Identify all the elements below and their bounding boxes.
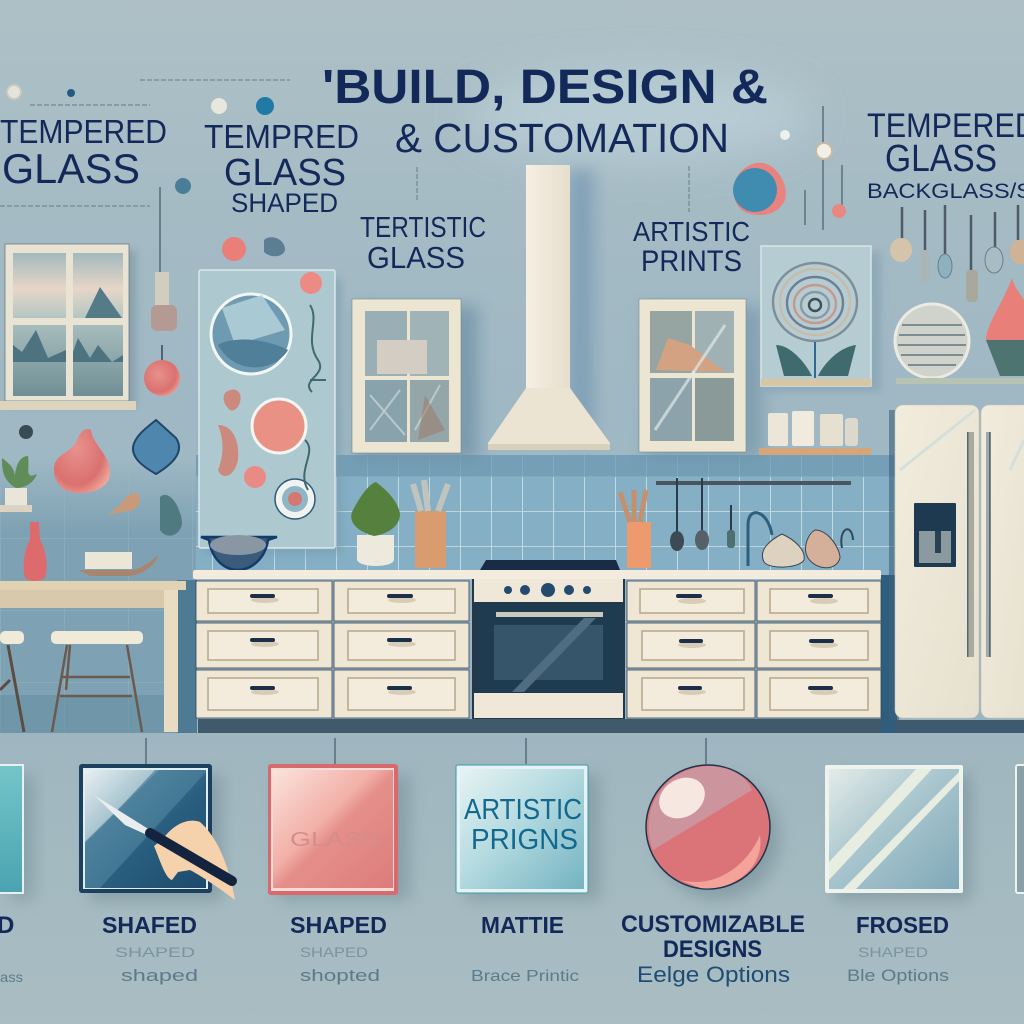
wall ornaments (19, 237, 285, 536)
caption: customizable designs: Eelge Options (637, 962, 790, 987)
sample card: shaped pink: GLASS (290, 829, 380, 851)
vase (24, 522, 47, 581)
main title (322, 61, 768, 161)
utensil crock left (413, 480, 448, 568)
caption: frosed: FROSED (856, 912, 949, 938)
caption: frosed: SHAPED (858, 944, 928, 960)
glass panel with shapes (199, 270, 342, 554)
hanging decor right of title (780, 106, 846, 230)
target disc (275, 479, 315, 519)
caption: shaped: SHAPED (300, 944, 368, 960)
icon: pink ball (144, 345, 180, 396)
caption: mattie: MATTIE (481, 912, 564, 938)
sample card: teal partial (0, 765, 34, 900)
caption: customizable designs (621, 911, 805, 987)
label: artistic prints: PRINTS (641, 245, 742, 278)
small wall dots and dashed rules (0, 80, 689, 212)
icon: pear (54, 418, 110, 493)
caption: shafed (102, 912, 198, 985)
caption: shaped (290, 912, 387, 985)
caption: partial left: ass (0, 969, 23, 985)
main title: & CUSTOMATION (395, 115, 729, 161)
caption: mattie (471, 912, 579, 985)
utensil rail with hanging tools (656, 478, 851, 566)
label: tempred glass shaped: TEMPRED (204, 118, 359, 155)
title glow (470, 70, 810, 160)
caption: partial left (0, 912, 23, 985)
sample card: partial right (1016, 765, 1024, 893)
caption: shafed: SHAFED (102, 912, 197, 938)
connector lines (146, 738, 706, 764)
sample card: frosted (825, 765, 971, 900)
plant on shelf (0, 456, 37, 512)
base cabinets left (196, 581, 469, 718)
label: tempred glass shaped (204, 118, 359, 218)
cabinet window right (639, 299, 763, 458)
label: tempred glass shaped: GLASS (224, 152, 346, 194)
icon: blue drop (133, 420, 179, 474)
cooking pot (201, 535, 277, 570)
pots on counter right (762, 529, 853, 568)
caption: shafed: shaped (121, 966, 198, 985)
caption: customizable designs: CUSTOMIZABLE (621, 911, 805, 938)
caption: shafed: SHAPED (115, 944, 195, 960)
label: tempred glass shaped: SHAPED (231, 188, 338, 218)
label: tempered glass left (0, 113, 167, 192)
striped plate (895, 304, 969, 378)
wall background (0, 0, 1024, 735)
caption: customizable designs: DESIGNS (663, 936, 762, 963)
art print on glass (761, 246, 881, 392)
toe kick (198, 719, 881, 733)
label: tertistic glass: GLASS (367, 240, 465, 275)
fridge (889, 405, 1024, 733)
label: tempered glass left: TEMPERED (0, 113, 167, 150)
caption: frosed: Ble Options (847, 966, 949, 985)
cooktop (480, 560, 620, 570)
stool partial (0, 631, 24, 732)
sample card: artistic prints (456, 765, 600, 900)
right shelf (896, 378, 1024, 384)
hand holding cutter (94, 795, 235, 900)
label: artistic prints (633, 216, 750, 278)
pink disc (252, 399, 306, 453)
countertop (193, 570, 881, 579)
sample: pink glass sphere (646, 765, 780, 900)
range hood (488, 165, 610, 450)
top pink blob (300, 272, 322, 294)
tiled backsplash (0, 455, 897, 734)
base cabinets right (627, 581, 881, 718)
label: tempered glass backglass (867, 107, 1024, 203)
label: tempered glass left: GLASS (2, 145, 140, 192)
hanging utensils (890, 205, 1024, 302)
water dispenser (914, 503, 956, 567)
sample card: shaped navy with hand (79, 764, 235, 900)
label: tempered glass backglass: BACKGLASS/S (867, 180, 1024, 203)
tray with dish (78, 552, 158, 576)
utensil crock right (620, 490, 651, 568)
botanical sketch (304, 305, 326, 490)
round blue mirror (211, 294, 291, 374)
potted plant (351, 482, 400, 566)
stool (51, 631, 143, 732)
sample card: artistic prints: ARTISTIC (464, 794, 582, 826)
sample card: shaped pink (268, 764, 410, 900)
caption: shaped: shopted (300, 966, 380, 985)
lower panel (0, 733, 1024, 1024)
small pink disc (244, 466, 266, 488)
caption: mattie: Brace Printic (471, 968, 579, 985)
icon: hanging brush (151, 187, 177, 331)
cups on shelf (759, 411, 871, 455)
pink basket vase (986, 278, 1024, 376)
main title: 'BUILD, DESIGN & (322, 61, 768, 114)
oven (472, 579, 625, 720)
caption: frosed (847, 912, 949, 985)
caption: shaped: SHAPED (290, 912, 387, 938)
small ornaments (218, 390, 241, 476)
dining table (0, 581, 186, 732)
label: tertistic glass: TERTISTIC (360, 212, 486, 244)
window with mountains (0, 244, 136, 410)
blue and pink ornament (733, 163, 786, 215)
label: tertistic glass (360, 212, 486, 275)
sample card: artistic prints: PRIGNS (471, 824, 578, 856)
cabinet window left (352, 299, 478, 460)
label: tempered glass backglass: GLASS (885, 138, 997, 180)
label: artistic prints: ARTISTIC (633, 216, 750, 247)
